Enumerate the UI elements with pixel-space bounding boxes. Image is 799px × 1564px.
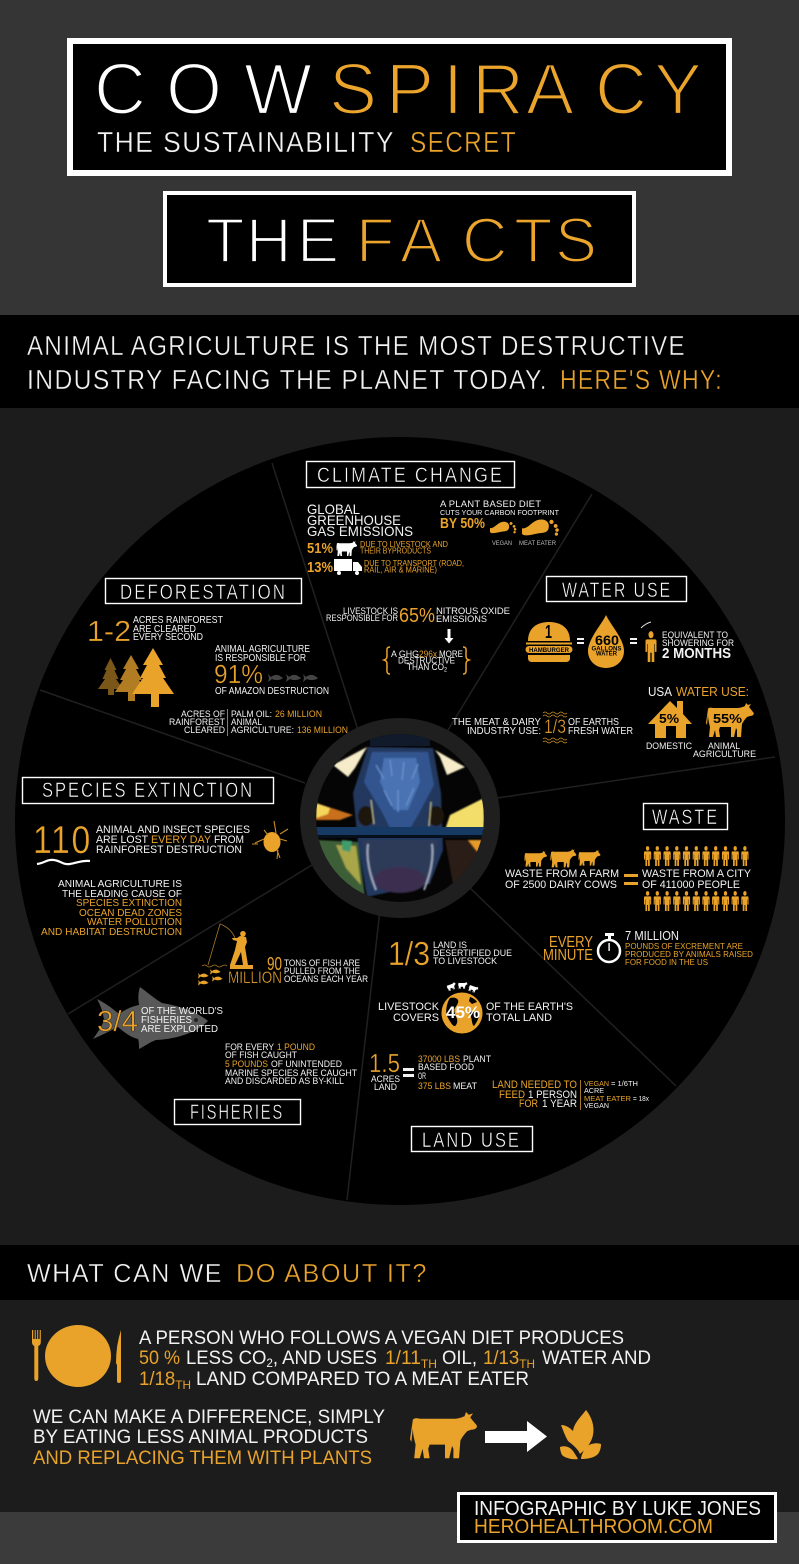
stat: 90 million tons: OCEANS EACH YEAR [284, 974, 368, 985]
heading: the facts: FACTS [356, 206, 597, 276]
icon: cow 55 percent: AGRICULTURE [693, 749, 756, 759]
text: waste comparison: WASTE FROM A CITY [642, 868, 752, 880]
stat: 90 million tons: TONS OF FISH ARE [284, 958, 360, 969]
heading: the facts [165, 193, 634, 285]
icon: water drop [588, 615, 624, 668]
stat: land needed per person [492, 1079, 649, 1110]
text: vegan diet comparison: 1/18 [139, 1369, 176, 1390]
text: leading cause: THE LEADING CAUSE OF [62, 888, 182, 900]
stat: 110 species: FROM [214, 834, 244, 846]
title panel: SECRET [410, 127, 517, 159]
stat: 110 species: EVERY DAY [151, 834, 212, 846]
text: vegan diet comparison: TH [519, 1357, 535, 1371]
stat: 90 million tons [228, 954, 368, 987]
stat: 110 species: ARE LOST [96, 834, 148, 846]
stat: one third fresh water: 1/3 [544, 717, 566, 738]
stat: 1.5 acres land: ACRES [371, 1074, 400, 1085]
stat: 1.5 acres land: MEAT [453, 1081, 477, 1091]
text: vegan diet comparison: 50 % [139, 1348, 180, 1369]
stat: 91 percent amazon: OF AMAZON DESTRUCTION [215, 686, 329, 697]
stat: acres cleared: PALM OIL: [231, 709, 272, 720]
heading: fisheries: FISHERIES [190, 1101, 284, 1124]
action band: DO ABOUT IT? [236, 1258, 428, 1288]
text: global greenhouse gas emissions: GREENHOUSE [307, 512, 401, 528]
stat: acres cleared: RAINFOREST [169, 717, 225, 728]
text: waste comparison: WASTE FROM A FARM [505, 868, 619, 880]
credit box: HEROHEALTHROOM.COM [474, 1516, 713, 1538]
icon: people rows [644, 846, 748, 911]
callout: ghg 296x: A GHG [391, 649, 419, 659]
panel: fisheries [93, 924, 368, 1124]
callout: ghg 296x: MORE [439, 649, 463, 659]
icon: angler [198, 924, 253, 986]
stat: three quarters fisheries [97, 1006, 223, 1038]
stat: 91 percent amazon: ANIMAL AGRICULTURE [215, 644, 310, 655]
icon: footprints: MEAT EATER [519, 541, 557, 547]
text: 7 million pounds: 7 MILLION [625, 928, 679, 943]
stat: land needed per person: 1 YEAR [542, 1098, 577, 1110]
text: vegan diet comparison [139, 1328, 651, 1392]
stat: every minute: MINUTE [543, 947, 593, 964]
icon: water drop: WATER [596, 650, 617, 658]
stat: one third fresh water: OF EARTHS [568, 717, 619, 728]
stat: 90 million tons: 90 [267, 954, 282, 974]
text: by-kill [225, 1042, 357, 1087]
icon: person showering [641, 622, 656, 662]
text: global greenhouse gas emissions: GAS EMISSIONS [307, 523, 413, 539]
icon: water drop: 660 [595, 632, 619, 648]
stat: 1.5 acres land: 1.5 [369, 1048, 400, 1078]
intro band: HERE'S WHY: [560, 364, 723, 395]
text: by-kill: OF UNINTENDED [271, 1059, 342, 1070]
stat: one third desertified: 1/3 [388, 935, 430, 972]
icon: trees [98, 648, 174, 707]
stat: 65 percent nitrous oxide: LIVESTOCK IS [343, 606, 398, 616]
stat: 45 percent land: LIVESTOCK [378, 1001, 440, 1013]
stat: 1-2 acres: ARE CLEARED [133, 624, 196, 635]
stat: 13 percent transport: DUE TO TRANSPORT (ROAD, [364, 559, 464, 568]
text: 7 million pounds: POUNDS OF EXCREMENT ARE [625, 941, 743, 951]
stat: land needed per person: FOR [519, 1098, 538, 1110]
text: vegan diet comparison: , AND USES [273, 1348, 377, 1369]
stat: 1.5 acres land: PLANT [463, 1054, 491, 1064]
text: plant based diet [440, 499, 560, 532]
panel: land use [369, 935, 649, 1152]
text: usa water use: WATER USE: [676, 684, 749, 699]
callout: ghg 296x: 2 [444, 668, 448, 674]
stat: 65 percent nitrous oxide [326, 605, 510, 627]
action band [0, 1245, 799, 1300]
stat: 45 percent land: TOTAL LAND [486, 1012, 552, 1024]
heading: water use: WATER USE [562, 579, 672, 602]
text: vegan diet comparison: LAND COMPARED TO A MEAT EATER [196, 1369, 529, 1390]
stat: 51 percent livestock: DUE TO LIVESTOCK AND [360, 540, 448, 549]
stat: acres cleared: ANIMAL [231, 717, 262, 728]
text: plant based diet: CUTS YOUR CARBON FOOTPRINT [440, 508, 560, 517]
icon: down arrow [444, 629, 454, 644]
text: make a difference: WE CAN MAKE A DIFFERENCE, SIMPLY [33, 1407, 385, 1428]
text: global greenhouse gas emissions [307, 501, 413, 539]
stat: 51 percent livestock: THEIR BYPRODUCTS [360, 546, 431, 556]
stat: 90 million tons: PULLED FROM THE [284, 966, 360, 977]
panel: climate change [306, 462, 560, 674]
stat: 1.5 acres land: OR [418, 1071, 426, 1081]
text: waste comparison: OF 411000 PEOPLE [642, 879, 740, 891]
text: equivalent to showering: EQUIVALENT TO [662, 630, 728, 641]
stat: acres cleared [169, 709, 348, 736]
stat: one third desertified: LAND IS [433, 940, 467, 951]
text: make a difference [33, 1407, 385, 1469]
stat: 91 percent amazon: 91% [214, 659, 263, 689]
stat: 65 percent nitrous oxide: 65% [399, 605, 435, 627]
icon: large fish [93, 987, 208, 1049]
text: by-kill: 1 POUND [277, 1042, 315, 1053]
icon: three cows [524, 849, 600, 867]
stat: acres cleared: 136 MILLION [297, 725, 348, 736]
stat: land needed per person: FEED [499, 1089, 525, 1101]
icon: footprints: VEGAN [492, 541, 512, 547]
equals sign [577, 638, 637, 644]
stat: one third fresh water [452, 712, 633, 743]
stat: 110 species: RAINFOREST DESTRUCTION [96, 844, 242, 856]
stat: one third desertified: TO LIVESTOCK [433, 956, 498, 967]
text: by-kill: FOR EVERY [225, 1042, 275, 1053]
callout: ghg 296x: THAN CO [407, 662, 448, 672]
text: vegan diet comparison: A PERSON WHO FOLLOWS A VEGAN DIET PRODUCES [139, 1328, 624, 1349]
icon: water drop: GALLONS [592, 646, 622, 652]
panel: water use [452, 576, 756, 759]
stat: land needed per person: VEGAN [584, 1079, 609, 1088]
stat: one third fresh water: THE MEAT & DAIRY [452, 717, 541, 728]
icon: house 5 percent: DOMESTIC [646, 741, 692, 751]
text: 7 million pounds: PRODUCED BY ANIMALS RAISED [625, 949, 753, 959]
icon: plant [560, 1410, 601, 1459]
stat: 13 percent transport [307, 559, 464, 576]
callout: ghg 296x: 296x [419, 649, 437, 659]
stat: 110 species [33, 819, 250, 864]
stat: one third fresh water: FRESH WATER [568, 726, 633, 737]
stat: 1.5 acres land [369, 1048, 491, 1093]
text: by-kill: 5 POUNDS [225, 1059, 268, 1070]
stat: land needed per person: = 1/6TH [611, 1079, 638, 1088]
text: usa water use: USA [648, 684, 672, 699]
text: by-kill: MARINE SPECIES ARE CAUGHT [225, 1068, 357, 1079]
stat: 13 percent transport: 13% [307, 559, 333, 576]
stat: 1.5 acres land: LAND [374, 1082, 397, 1093]
icon: cow 55 percent: 55% [713, 711, 742, 726]
stat: 65 percent nitrous oxide: EMISSIONS [436, 614, 487, 625]
icon: insect [252, 821, 288, 859]
icon: hamburger: 1 [545, 622, 552, 642]
stat: land needed per person: MEAT EATER [584, 1094, 632, 1103]
stat: three quarters fisheries: FISHERIES [141, 1015, 192, 1026]
stat: 45 percent land: COVERS [393, 1012, 439, 1024]
text: waste comparison: OF 2500 DAIRY COWS [505, 879, 617, 891]
panel: waste [505, 804, 753, 967]
stat: one third fresh water: INDUSTRY USE: [467, 726, 541, 737]
icon: house 5 percent [646, 701, 692, 751]
credit box: INFOGRAPHIC BY LUKE JONES [474, 1498, 761, 1520]
text: by-kill: OF FISH CAUGHT [225, 1050, 297, 1061]
text: equivalent to showering: 2 MONTHS [662, 646, 731, 662]
stat: land needed per person: ACRE [584, 1086, 604, 1095]
callout: ghg 296x [384, 647, 469, 674]
stat: 51 percent livestock [307, 540, 448, 557]
stat: every minute [543, 934, 593, 964]
text: vegan diet comparison: 1/13 [483, 1348, 520, 1369]
stat: land needed per person: LAND NEEDED TO [492, 1079, 577, 1091]
icon: hamburger: HAMBURGER [529, 648, 570, 654]
text: leading cause [41, 878, 182, 938]
text: vegan diet comparison: 2 [266, 1356, 273, 1370]
text: make a difference: BY EATING LESS ANIMAL PRODUCTS [33, 1427, 368, 1448]
icon: globe with cows [442, 982, 482, 1034]
icon: stopwatch [598, 933, 620, 962]
icon: cow [410, 1412, 477, 1458]
text: by-kill: AND DISCARDED AS BY-KILL [225, 1076, 344, 1087]
stat: three quarters fisheries: ARE EXPLOITED [141, 1024, 218, 1035]
stat: 1-2 acres [87, 615, 223, 648]
text: leading cause: ANIMAL AGRICULTURE IS [58, 878, 182, 890]
stat: 65 percent nitrous oxide: NITROUS OXIDE [436, 606, 510, 617]
text: leading cause: SPECIES EXTINCTION [76, 897, 182, 909]
heading: waste: WASTE [652, 806, 719, 829]
text: equivalent to showering: SHOWERING FOR [662, 638, 734, 649]
stat: 1-2 acres: ACRES RAINFOREST [133, 615, 223, 626]
icon: footprints [490, 520, 559, 547]
stat: one third desertified [388, 935, 512, 972]
stat: land needed per person: 1 PERSON [528, 1089, 577, 1101]
text: 7 million pounds [625, 928, 753, 967]
stat: 1.5 acres land: BASED FOOD [418, 1062, 474, 1072]
text: 7 million pounds: FOR FOOD IN THE US [625, 957, 708, 967]
stat: 45 percent land: OF THE EARTH'S [486, 1001, 573, 1013]
icon: cow 55 percent: ANIMAL [708, 741, 740, 751]
heading: the facts: THE [206, 206, 339, 276]
text: plant based diet: A PLANT BASED DIET [440, 499, 541, 510]
title panel: COW [94, 50, 312, 130]
text: usa water use [648, 684, 749, 699]
stat: acres cleared: AGRICULTURE: [231, 725, 294, 736]
stat: 110 species: ANIMAL AND INSECT SPECIES [96, 824, 250, 836]
stat: 90 million tons: MILLION [228, 968, 282, 987]
stat: acres cleared: ACRES OF [181, 709, 225, 720]
icon: plate and cutlery [32, 1325, 121, 1387]
heading: fisheries [174, 1100, 300, 1124]
text: equivalent to showering [662, 630, 734, 662]
stat: 1.5 acres land: 37000 LBS [418, 1054, 460, 1064]
stat: 1.5 acres land: 375 LBS [418, 1081, 451, 1091]
heading: deforestation: DEFORESTATION [120, 581, 287, 604]
credit box [458, 1494, 776, 1542]
stat: three quarters fisheries: OF THE WORLD'S [141, 1006, 223, 1017]
stat: 13 percent transport: RAIL, AIR & MARINE) [364, 566, 437, 574]
text: global greenhouse gas emissions: GLOBAL [307, 501, 360, 517]
heading: climate change: CLIMATE CHANGE [317, 464, 504, 487]
text: vegan diet comparison: TH [175, 1378, 191, 1392]
icon: house 5 percent: 5% [659, 711, 679, 726]
text: leading cause: OCEAN DEAD ZONES [79, 907, 182, 919]
stat: 110 species: 110 [33, 819, 92, 862]
stat: land needed per person: = 18x [633, 1094, 649, 1103]
intro band: INDUSTRY FACING THE PLANET TODAY. [27, 364, 548, 395]
text: make a difference: AND REPLACING THEM WITH PLANTS [33, 1448, 372, 1469]
stat: 91 percent amazon [214, 644, 329, 697]
icon: globe with cows: 45% [446, 1003, 480, 1022]
action band: WHAT CAN WE [27, 1258, 223, 1288]
callout: ghg 296x: DESTRUCTIVE [398, 656, 455, 666]
panel: deforestation [87, 578, 348, 736]
panel: species extinction [22, 778, 288, 938]
intro band: ANIMAL AGRICULTURE IS THE MOST DESTRUCTIVE [27, 330, 686, 361]
centre photo: cow [300, 718, 500, 918]
heading: species extinction: SPECIES EXTINCTION [42, 779, 254, 802]
text: waste comparison [505, 868, 752, 891]
wheel of facts [15, 437, 785, 1205]
stat: one third desertified: DESERTIFIED DUE [433, 948, 512, 959]
text: vegan diet comparison: 1/11 [385, 1348, 421, 1369]
stat: acres cleared: CLEARED [184, 725, 225, 736]
stat: 45 percent land [378, 1001, 573, 1024]
intro band [0, 315, 799, 408]
stat: land needed per person: VEGAN [584, 1101, 609, 1110]
icon: cow 55 percent [693, 703, 756, 759]
stat: 91 percent amazon: IS RESPONSIBLE FOR [215, 653, 306, 664]
stat: 1-2 acres: EVERY SECOND [133, 632, 203, 643]
icon: hamburger [526, 622, 572, 662]
stat: acres cleared: 26 MILLION [275, 709, 322, 720]
text: leading cause: WATER POLLUTION [87, 916, 182, 928]
stat: three quarters fisheries: 3/4 [97, 1006, 138, 1038]
stat: 65 percent nitrous oxide: RESPONSIBLE FOR [326, 613, 398, 623]
heading: land use: LAND USE [422, 1129, 521, 1152]
title panel [70, 41, 729, 173]
title panel: SPIRACY [329, 50, 702, 130]
stat: every minute: EVERY [549, 934, 593, 951]
title panel: THE SUSTAINABILITY [97, 127, 395, 159]
stat: 1-2 acres: 1-2 [87, 616, 131, 648]
text: leading cause: AND HABITAT DESTRUCTION [41, 926, 182, 938]
icon: white arrow [485, 1421, 547, 1452]
text: vegan diet comparison: TH [421, 1357, 437, 1371]
text: plant based diet: BY 50% [440, 515, 485, 532]
text: vegan diet comparison: LESS CO [186, 1348, 268, 1369]
text: vegan diet comparison: OIL, [442, 1348, 477, 1369]
stat: 51 percent livestock: 51% [307, 540, 333, 557]
text: vegan diet comparison: WATER AND [542, 1348, 651, 1369]
